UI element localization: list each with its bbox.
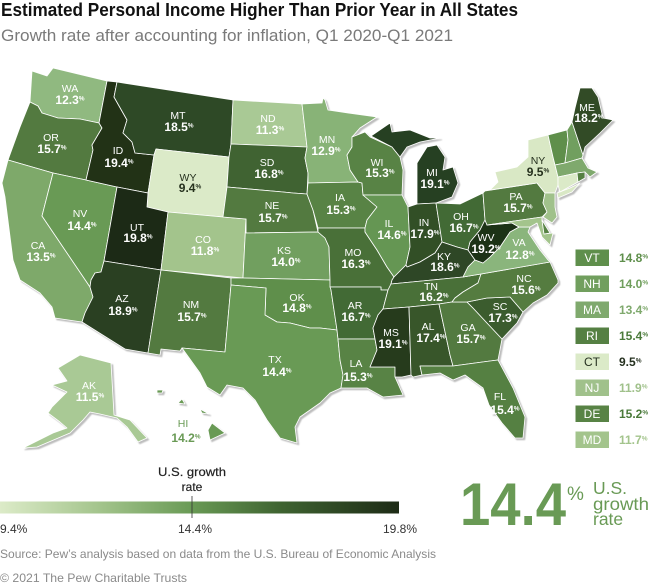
state: OR: % [61,144,67,152]
state: LA [338,339,403,397]
state: KY [391,242,475,284]
state: MN [302,98,377,183]
state: MN: % [335,146,341,154]
state: ND [231,100,307,147]
state: NC: 15.6 [511,283,535,297]
state: IL: 14.6 [377,228,401,242]
state: SD: 16.8 [254,167,278,181]
RI key [576,328,648,344]
state: AK: % [98,392,104,400]
state: WV: % [495,244,501,252]
DE key: DE [584,407,600,421]
state: FL: % [514,406,520,412]
big U.S. growth rate callout: rate [593,509,623,529]
NJ key: NJ [585,381,599,395]
state: MS: MS [383,327,399,339]
marker for U.S. rate [191,496,193,518]
MA key: % [642,306,648,312]
state: OK [231,278,337,330]
big U.S. growth rate callout: growth [593,494,649,514]
state: KS: KS [277,245,291,257]
state: MT [114,82,233,157]
state: WA: 12.3 [55,93,79,107]
state: WY: % [195,184,201,190]
state: ID: ID [113,145,124,157]
state: MT: MT [170,110,186,122]
state: CO: % [213,246,219,254]
state: NV: NV [73,208,87,220]
state: MS: % [402,340,408,346]
state: ID: 19.4 [104,156,128,170]
state: ME: ME [579,102,595,114]
DE key [576,406,648,422]
state: MS: 19.1 [378,337,402,351]
state: NY [490,135,580,198]
state: VA: % [529,250,535,258]
state: OH [436,193,485,250]
state: NE [223,187,318,233]
DE key: % [642,410,648,416]
state: NE: NE [265,200,279,212]
state: MD [487,217,553,245]
CT key: CT [584,355,601,369]
state: GA: % [480,334,486,342]
map of states [2,68,613,448]
legend: small northeastern states [576,250,648,448]
state: WI: WI [371,157,383,169]
state: VT [548,130,568,165]
state: OH: % [473,224,479,230]
state: AL: AL [422,321,435,333]
NH key: NH [583,277,601,291]
state: IA [307,182,377,228]
VT key [576,250,648,266]
state: AZ: AZ [115,293,129,305]
NH key: 14.0 [619,277,642,291]
state: IN [406,203,442,267]
big U.S. growth rate callout: 14.4 [460,471,567,538]
state: WI [347,132,403,195]
color bar [0,502,399,514]
state: TX: TX [268,354,282,366]
state: MN: MN [319,134,335,146]
state: AL: % [440,334,446,340]
state: WY: WY [180,172,196,184]
state: AK [23,355,147,448]
U.S. growth rate label: U.S. growth [158,465,226,479]
state: NV: % [91,222,97,228]
state: GA: GA [460,322,476,334]
state: ME [572,88,613,155]
state: AL [409,304,453,377]
state: NC: NC [516,273,532,285]
NJ key: % [642,384,648,390]
state: CA: % [50,252,56,260]
state: GA: 15.7 [456,332,480,346]
MD key: MD [583,433,602,447]
state: TX: 14.4 [262,365,286,379]
CT key: % [636,358,642,364]
state: MT: 18.5 [164,120,188,134]
state: PA [483,183,547,225]
state: NY: NY [531,155,545,167]
state: FL [420,360,525,438]
state: IN: % [434,230,440,236]
state: ND: ND [260,113,276,125]
state: SC [467,297,523,339]
state: IL [363,195,410,277]
RI key: % [642,332,648,338]
state: KS [243,219,330,280]
state: WV: 19.2 [471,242,495,256]
state: AR: % [365,312,371,320]
state: NE: % [282,214,288,220]
state: NM: % [201,312,207,320]
state: IL: % [401,230,407,238]
state: IA: 15.3 [326,203,350,217]
state: VA: VA [512,237,526,249]
state: NM: NM [183,299,199,311]
state: TN [383,274,481,309]
state: NH [565,122,583,163]
NJ key: 11.9 [619,381,642,395]
NH key: % [642,280,648,286]
state: OK: % [306,304,312,310]
state: CA: CA [31,240,45,252]
MD key: % [642,436,648,442]
state: NY: 9.5 [527,165,543,179]
big U.S. growth rate callout: U.S. [593,478,627,498]
state: MO: % [365,260,371,266]
state: PA: 15.7 [503,201,527,215]
state: HI islands [157,390,225,440]
state: NV [42,173,117,287]
state: RI [577,172,585,182]
state: MI upper peninsula and lower peninsula [371,123,458,204]
VT key: VT [584,251,600,265]
state: FL: 15.4 [490,403,514,417]
state: MN: 12.9 [311,144,335,158]
state: PA: PA [509,191,523,203]
state: TX: % [286,368,292,374]
state: CA: 13.5 [26,250,50,264]
state: MI upper peninsula and lower peninsula: MI [426,167,438,179]
state: KY: % [454,262,460,270]
MA key: 13.4 [619,303,642,317]
state: IA: IA [335,192,345,204]
state: MI upper peninsula and lower peninsula: 19.1 [420,177,444,191]
state: AL: 17.4 [416,331,440,345]
state: OR: 15.7 [37,142,61,156]
state: CT [558,173,578,192]
state: NM: 15.7 [177,310,201,324]
state: ND: % [278,126,284,132]
state: UT [104,187,168,270]
CT key [576,354,642,370]
state: TN: % [443,292,449,300]
state: NV: 14.4 [67,219,91,233]
state: ND: 11.3 [256,123,278,137]
subtitle: Growth rate after accounting for inflation, Q1 2020-Q1 2021 [1,26,453,45]
scale values: 14.4% [178,522,212,536]
state: FL: FL [494,391,506,403]
MA key [576,302,648,318]
state: MO: 16.3 [341,257,365,271]
source note: Source: Pew’s analysis based on data from the U.S. Bureau of Economic Analysis [0,547,436,561]
CT key: 9.5 [619,355,636,369]
state: AZ [82,261,161,353]
state: NC [452,262,558,312]
big U.S. growth rate callout [460,471,649,538]
state: KS: % [295,258,301,264]
state: WI: 15.3 [365,166,389,180]
state: AZ: 18.9 [108,304,132,318]
state: UT: UT [130,222,145,234]
state: WY [147,149,229,217]
state: WV [468,220,519,263]
state: IN: 17.9 [410,227,434,241]
state: AK: AK [82,380,96,392]
state: MT: % [188,122,194,130]
MA key: MA [583,303,601,317]
state: VA [463,227,550,277]
state: ID: % [128,158,134,166]
gradient scale legend [0,465,417,536]
state: ME: 18.2 [574,111,598,125]
state: OR [8,102,102,180]
state: OK: OK [289,292,305,304]
state: WI: % [389,168,395,176]
state: MI upper peninsula and lower peninsula: % [444,180,450,186]
state: SC: % [512,314,518,320]
state: GA [439,302,502,366]
state: WA [30,68,107,123]
state: NY: % [543,168,549,174]
MD key: 11.7 [619,433,642,447]
state: OH: 16.7 [449,221,473,235]
state: SD [227,144,308,194]
state: NM [148,270,231,355]
state: TN: TN [424,281,438,293]
label: HI: HI [178,418,188,430]
RI key: RI [586,329,598,343]
state: SD: % [278,170,284,176]
state: WA: WA [62,83,78,95]
state: SC: SC [493,301,508,313]
state: IA: % [350,206,356,212]
NJ key [576,380,648,396]
state: AR: 16.7 [341,310,365,324]
U.S. growth rate label: rate [182,480,203,494]
state: AK: 11.5 [76,390,98,404]
state: UT: 19.8 [123,231,147,245]
scale values: 9.4% [0,522,28,536]
state: TN: 16.2 [419,290,443,304]
U.S. growth rate label [158,465,226,494]
state: AR: AR [348,300,363,312]
state: SD: SD [260,157,275,169]
state: IL: IL [385,218,394,230]
state: DE [542,220,550,234]
state: MS [370,307,411,377]
state: CO: 11.8 [191,244,213,258]
state: MO [318,228,394,290]
big U.S. growth rate callout: % [567,484,584,505]
scale values: 19.8% [383,522,417,536]
state: KY: 18.6 [430,260,454,274]
MD key [576,432,648,448]
VT key: % [642,254,648,260]
state: TX [182,285,343,443]
state: IN: IN [419,217,429,229]
state: UT: % [147,234,153,240]
state: SC: 17.3 [488,311,512,325]
RI key: 15.4 [619,329,642,343]
state: LA: LA [350,358,362,370]
state: MA [555,158,597,177]
state: OK: 14.8 [282,301,306,315]
label: HI: 14.2 [171,431,195,445]
scale values [0,522,417,536]
DE key: 15.2 [619,407,642,421]
state: CA [2,160,93,322]
state: PA: % [527,204,533,210]
state: AZ: % [132,306,138,314]
state: NE: 15.7 [258,211,282,225]
state: WY: 9.4 [179,181,195,195]
state: LA: 15.3 [343,370,367,384]
state: VA: 12.8 [505,248,529,262]
state: KS: 14.0 [271,255,295,269]
state: NJ [543,193,557,223]
state: KY: KY [437,251,451,263]
state: AR [330,287,388,339]
state: LA: % [367,372,373,380]
state: WV: WV [478,232,494,244]
label: HI [171,418,201,445]
VT key: 14.8 [619,251,642,265]
state: OR: OR [43,132,59,144]
state: ID [86,81,154,193]
state: MO: MO [345,247,361,259]
NH key [576,276,648,292]
state: ME: % [598,114,604,120]
label: HI: % [195,434,201,440]
state: CO [161,212,246,278]
state: CO: CO [195,234,211,246]
state: NC: % [535,286,541,292]
state: OH: OH [453,211,469,223]
state: WA: % [79,96,85,102]
